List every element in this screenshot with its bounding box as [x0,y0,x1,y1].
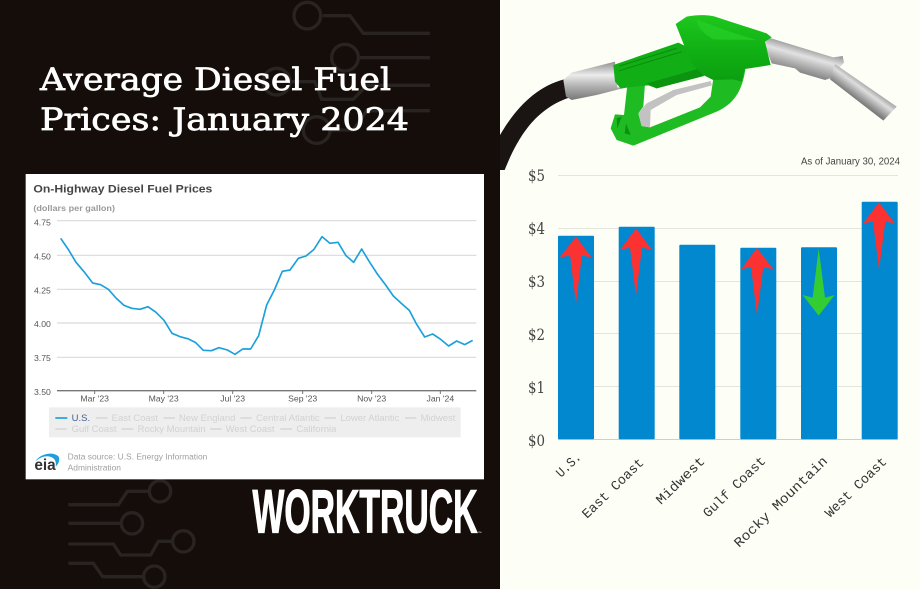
y axis dollar labels: $0 [528,432,545,450]
x axis labels: Sep '23 [288,393,317,403]
x axis labels: Mar '23 [80,393,109,403]
title: Average Diesel Fuel [39,62,391,98]
panel: dark left background [0,0,500,589]
chart unit label: (dollars per gallon) [33,203,115,213]
x axis labels: Jan '24 [427,393,454,403]
legend: California [296,424,337,435]
y axis labels: 3.50 [34,387,51,397]
category labels: East Coast [580,456,648,523]
decorative circuit pattern: top [263,2,430,143]
bar chart: diesel price by region [528,167,898,552]
legend: U.S. [72,413,90,424]
category labels: West Coast [823,455,891,522]
x axis labels: Jul '23 [220,393,245,403]
y axis labels: 4.75 [34,218,51,228]
legend: Central Atlantic [256,413,320,424]
y axis dollar labels: $1 [528,379,545,397]
y axis labels: 4.50 [34,251,51,261]
bars [558,202,898,439]
green head [676,15,772,82]
y axis dollar labels: $3 [528,273,545,291]
arrows: price change direction [560,202,895,316]
title: Prices: January 2024 [40,102,409,138]
y axis dollar labels [528,167,545,450]
hose [500,79,569,170]
logo: WORKTRUCK: ™ [478,531,482,535]
data source note: Data source: U.S. Energy Information [68,451,208,461]
logo: WORKTRUCK [252,478,482,546]
legend: Gulf Coast [72,424,117,435]
y axis labels: 3.75 [34,353,51,363]
note: as of date: As of January 30, 2024 [801,156,900,168]
legend: Lower Atlantic [340,413,400,424]
EIA logo: eia [34,457,56,474]
logo: WORKTRUCK: WORKTRUCK [252,478,478,546]
panel: EIA line chart card [26,174,484,479]
y axis dollar labels: $2 [528,326,545,344]
category labels: Midwest [654,455,709,509]
legend: East Coast [112,413,158,424]
x axis labels: May '23 [149,393,179,403]
y axis dollar labels: $4 [528,220,545,238]
trigger [638,81,712,127]
trigger guard [611,67,746,146]
legend: Rocky Mountain [138,424,206,435]
y axis dollar labels: $5 [528,167,545,185]
panel: cream right background [500,0,920,589]
title [39,62,409,138]
category labels: Rocky Mountain [732,455,832,552]
y axis labels: 4.00 [34,319,51,329]
data source note: Administration [68,463,121,473]
x axis labels: Nov '23 [357,393,386,403]
silver spout collar [765,38,844,80]
silver spout tube [830,64,897,121]
category labels [554,451,891,552]
decorative circuit pattern: bottom [68,481,194,587]
legend: Midwest [421,413,456,424]
legend [49,407,461,437]
silver ferrule [563,62,624,100]
legend: New England [179,413,235,424]
icon: green fuel nozzle with hose [500,15,897,170]
category labels: Gulf Coast [701,455,770,522]
guard finger holes [617,117,631,135]
y axis labels [34,218,51,397]
data source note [68,451,208,473]
green grip [613,43,713,89]
legend: West Coast [226,424,275,435]
x axis labels [80,393,454,403]
line: U.S. diesel price [61,237,473,354]
category labels: U.S. [554,451,585,482]
chart heading: On-Highway Diesel Fuel Prices [33,184,212,196]
y axis labels: 4.25 [34,285,51,295]
